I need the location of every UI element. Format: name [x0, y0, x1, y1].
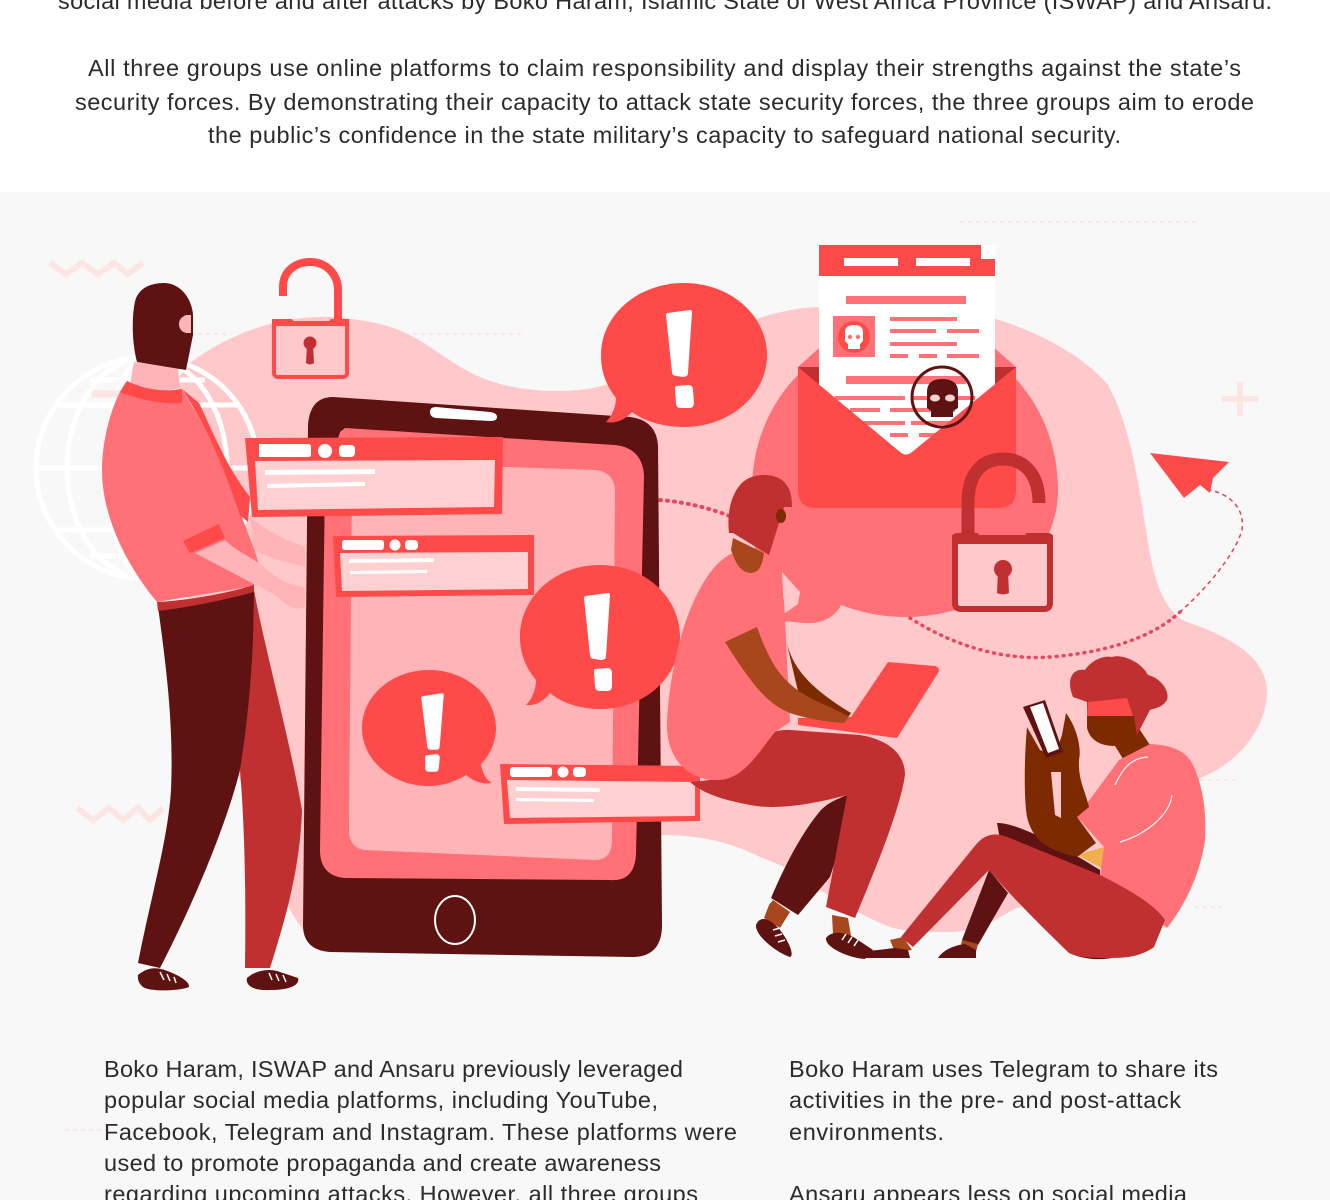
globe: [36, 357, 258, 579]
envelope with document: [798, 245, 1016, 508]
intro text block: the public’s confidence in the state military’s capacity to safeguard national security.: [208, 122, 1121, 148]
paper plane icon: [1150, 453, 1229, 498]
body text right column: activities in the pre- and post-attack: [789, 1087, 1181, 1113]
envelope front: [798, 367, 1016, 508]
alert bubble middle: [520, 565, 680, 709]
seated person with laptop: [667, 475, 939, 959]
eye opening: [179, 315, 191, 333]
near arm: [195, 540, 305, 609]
message window lower: [500, 764, 700, 824]
pale collar gap: [782, 572, 800, 614]
phone screen: [320, 428, 644, 880]
man standing with balaclava: [102, 283, 305, 990]
shirt: [1077, 744, 1205, 928]
far arm: [250, 517, 305, 567]
trousers: [901, 835, 1165, 958]
mask band: [1087, 698, 1133, 716]
back leg: [771, 795, 847, 915]
pink background blob: [160, 304, 1267, 945]
phone speaker: [430, 407, 497, 421]
shoes: [756, 919, 873, 959]
shoes: [138, 968, 298, 990]
shirt: [667, 548, 790, 780]
waistband: [157, 585, 254, 611]
body text right column: [789, 1056, 1218, 1200]
message window middle: [333, 535, 534, 597]
small skull icon: [845, 325, 863, 349]
trousers: [690, 730, 905, 918]
shirt hem detail: [1077, 847, 1104, 868]
ankles: [764, 900, 851, 936]
intro text block: All three groups use online platforms to claim responsibility and display their strengths against the state’s: [88, 55, 1241, 81]
red trouser leg: [240, 590, 302, 968]
document sheet: [819, 245, 995, 460]
ankles: [890, 937, 978, 952]
dark pink blob behind envelope: [752, 330, 1058, 623]
message window upper: [245, 437, 503, 517]
collar: [120, 381, 182, 403]
seated person with smartphone: [860, 656, 1205, 959]
eye: [776, 509, 786, 523]
skull stamp: [912, 367, 972, 427]
neck: [130, 362, 180, 391]
dotted connector lines: [660, 490, 1242, 658]
alert bubble lower: [362, 670, 496, 786]
near arm: [725, 627, 849, 723]
dark trouser leg: [138, 590, 254, 968]
body text left column: used to promote propaganda and create awareness: [104, 1150, 661, 1176]
neck: [731, 538, 764, 573]
phone home button: [435, 896, 475, 944]
intro text block: [58, 0, 1272, 148]
body text right column: Boko Haram uses Telegram to share its: [789, 1056, 1218, 1082]
lock on right: [952, 459, 1053, 609]
laptop: [798, 662, 939, 738]
background decorations: [50, 222, 1258, 1130]
arm: [1025, 713, 1096, 857]
body text left column: popular social media platforms, including YouTube,: [104, 1087, 658, 1113]
body text right column: environments.: [789, 1119, 944, 1145]
smartphone: [303, 397, 662, 957]
intro text block: security forces. By demonstrating their capacity to attack state security forces, the three groups aim to erode: [75, 89, 1254, 115]
body text left column: Facebook, Telegram and Instagram. These platforms were: [104, 1119, 737, 1145]
lap shadow: [997, 823, 1112, 959]
back leg: [962, 870, 1008, 945]
neck and face: [1087, 700, 1150, 762]
handheld phone: [1023, 700, 1063, 758]
lock top left: [272, 262, 349, 377]
balaclava: [133, 283, 193, 370]
shoes: [860, 944, 976, 958]
shirt trim: [182, 389, 250, 522]
hair: [1070, 656, 1168, 735]
body text left column: [104, 1056, 737, 1200]
alert bubble top: [601, 283, 767, 427]
inner screen: [349, 462, 615, 860]
sleeve cuff: [183, 524, 225, 553]
hood: [728, 475, 792, 555]
far arm: [786, 640, 851, 723]
body text left column: Boko Haram, ISWAP and Ansaru previously leveraged: [104, 1056, 683, 1082]
shirt: [102, 381, 259, 602]
